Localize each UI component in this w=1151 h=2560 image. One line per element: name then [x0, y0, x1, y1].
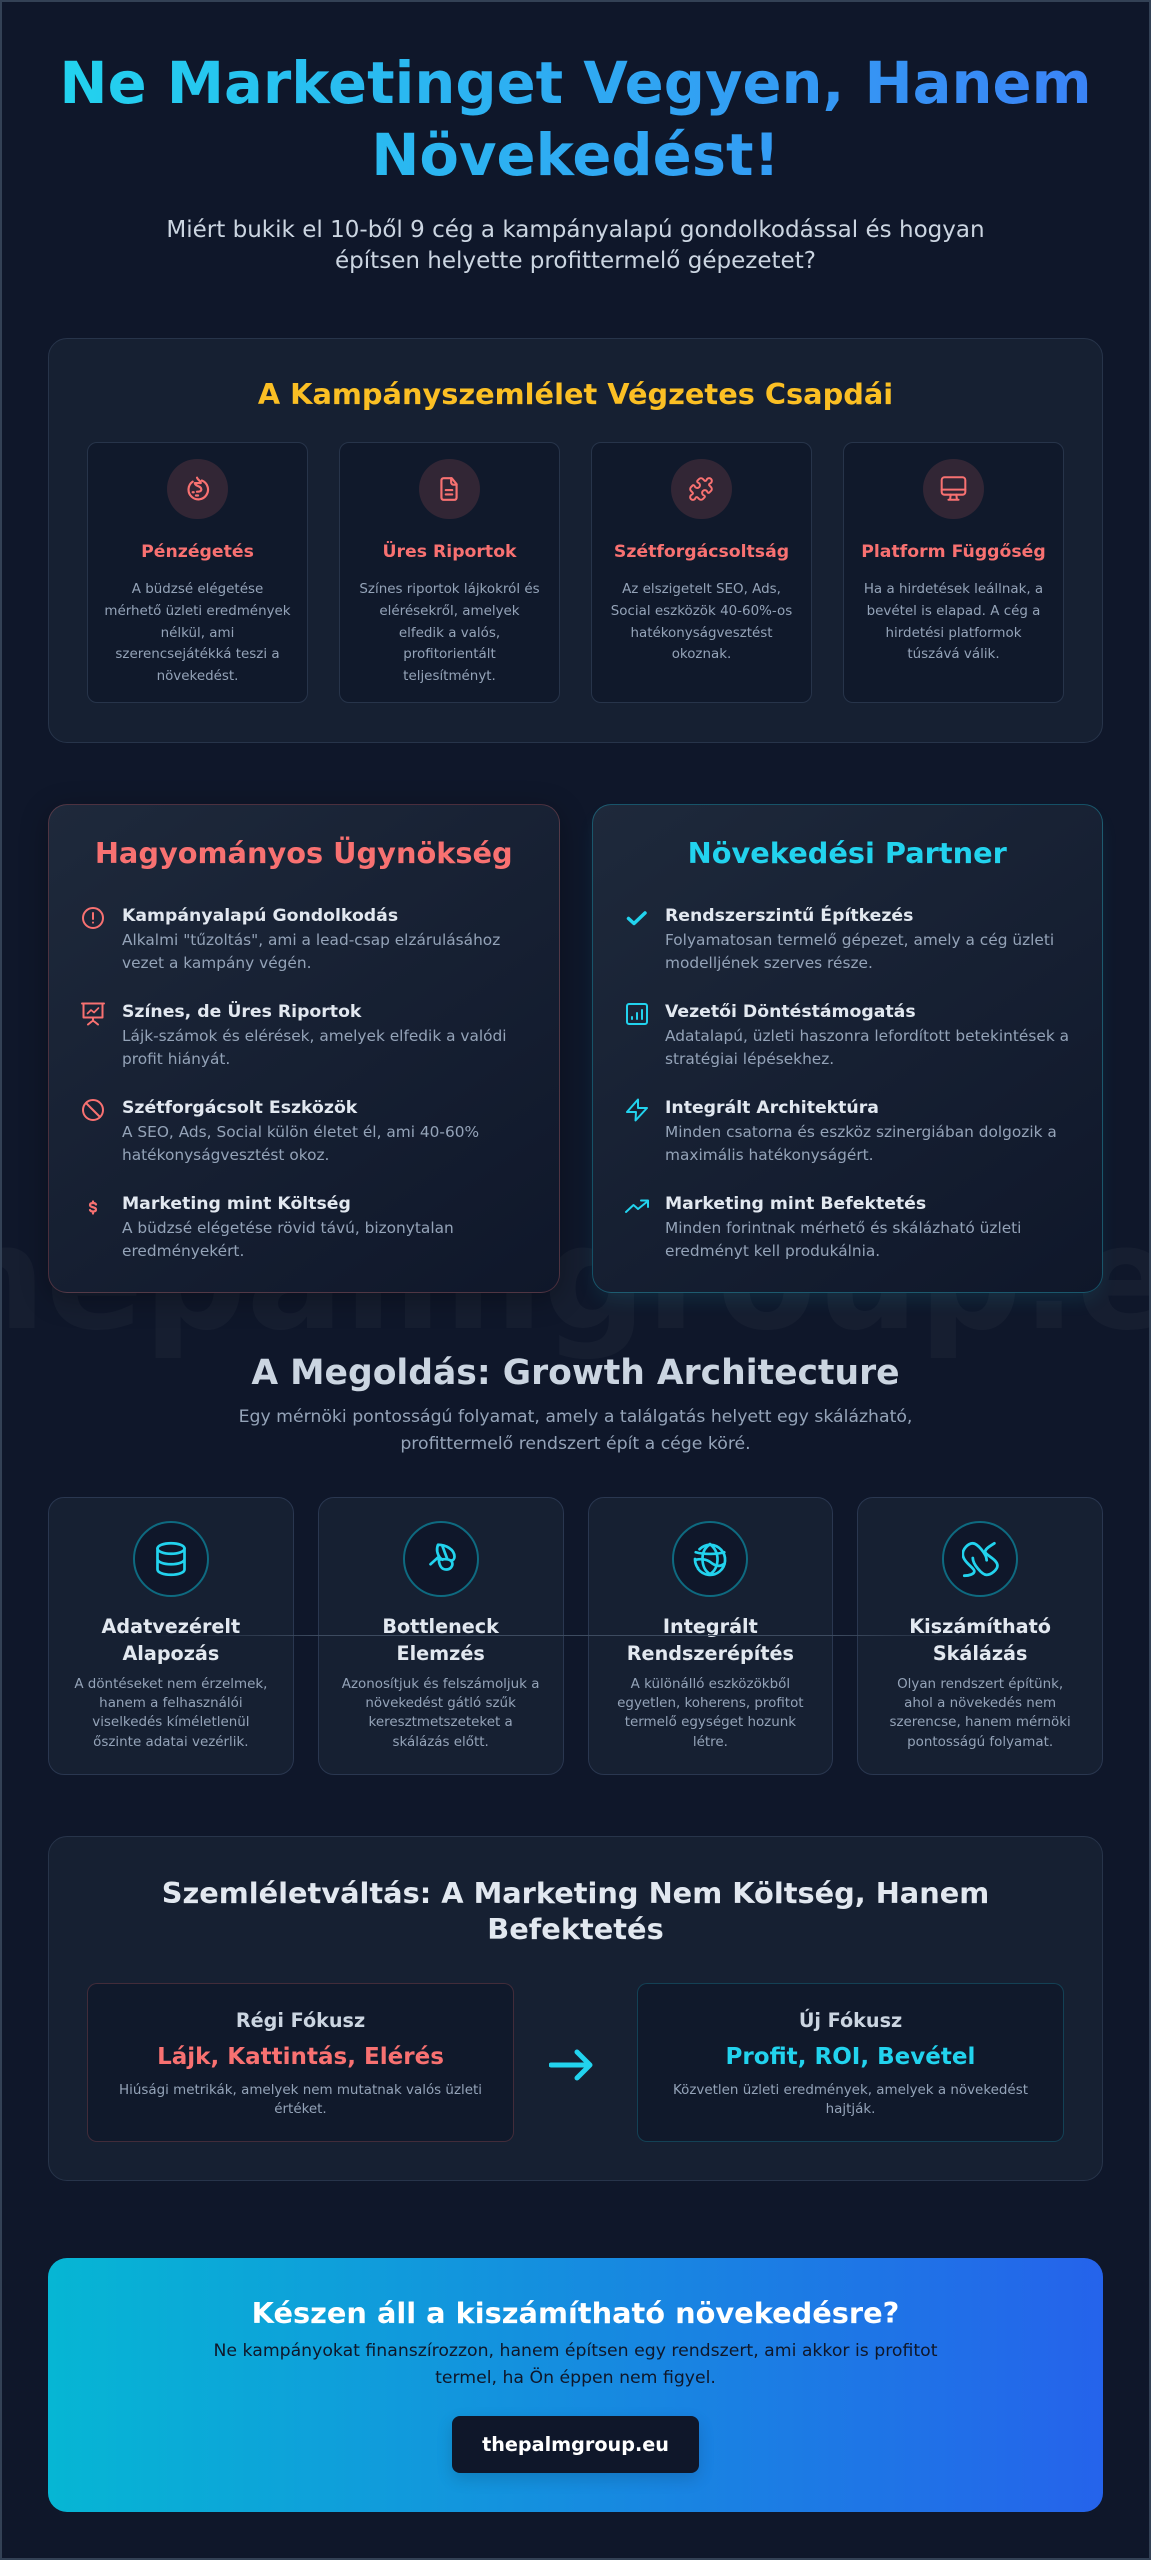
card title: Szétforgácsoltság	[614, 542, 789, 562]
card: Platform Függőség	[843, 442, 1064, 703]
card text: növekedést.	[157, 669, 238, 684]
card title	[627, 1615, 794, 1665]
description: Hiúsági metrikák, amelyek nem mutatnak valós üzleti	[119, 2083, 482, 2098]
card text: szerencse, hanem mérnöki	[889, 1715, 1071, 1730]
call to action	[48, 2258, 1103, 2512]
icon: document	[419, 459, 480, 519]
card text: keresztmetszeteket a	[369, 1715, 513, 1730]
item: campaign thinking	[82, 906, 500, 972]
icon: ban	[82, 1099, 104, 1121]
card: Szétforgácsoltság	[591, 442, 812, 703]
card text: egyetlen, koherens, profitot	[617, 1696, 804, 1711]
card text: mérhető üzleti eredmények	[104, 604, 291, 619]
item text: hatékonyságvesztést okoz.	[122, 1146, 329, 1164]
item text	[122, 931, 500, 972]
card title: Üres Riportok	[382, 542, 517, 562]
item text: eredményekért.	[122, 1242, 244, 1260]
card: data-driven foundation	[48, 1497, 294, 1775]
icon: check	[626, 911, 647, 926]
card text: skálázás előtt.	[392, 1735, 489, 1750]
card title: Elemzés	[396, 1642, 485, 1665]
item text	[122, 1219, 454, 1260]
card text: A büdzsé elégetése	[132, 582, 263, 597]
card title: Integrált	[663, 1615, 758, 1638]
card text: viselkedés kíméletlenül	[92, 1715, 250, 1730]
card title	[382, 1615, 500, 1665]
card text: növekedést gátló szűk	[365, 1696, 516, 1711]
cta text: termel, ha Ön éppen nem figyel.	[435, 2368, 716, 2388]
card text: Színes riportok lájkokról és	[359, 582, 540, 597]
item text: profit hiányát.	[122, 1050, 230, 1068]
item text: Lájk-számok és elérések, amelyek elfedik a valódi	[122, 1027, 507, 1045]
icon: presentation chart	[81, 1002, 105, 1026]
icon: database	[133, 1521, 209, 1597]
card text	[342, 1677, 539, 1750]
heading: traps: A Kampányszemlélet Végzetes Csapdái	[258, 377, 893, 411]
item text	[122, 1123, 479, 1164]
card text: szerencsejátékká teszi a	[115, 647, 280, 662]
connector line	[153, 1635, 998, 1636]
cta text	[48, 2338, 1103, 2392]
card text: teljesítményt.	[403, 669, 496, 684]
item text	[665, 1027, 1069, 1068]
card text: elfedik a valós,	[399, 626, 500, 641]
item title: Kampányalapú Gondolkodás	[122, 906, 398, 926]
card text: nélkül, ami	[161, 626, 234, 641]
card text: hanem a felhasználói	[99, 1696, 243, 1711]
solution subtitle: profittermelő rendszert épít a cége köré.	[400, 1434, 751, 1454]
panel: campaign traps	[48, 338, 1103, 743]
icon: dollar	[88, 1200, 98, 1215]
icon: trending up	[625, 1200, 649, 1213]
new metrics: Profit, ROI, Bevétel	[726, 2044, 975, 2070]
card text: Social eszközök 40-60%-os	[611, 604, 792, 619]
heading: mindset shift: Befektetés	[487, 1912, 664, 1946]
heading: mindset shift: Szemléletváltás: A Marketing Nem Költség, Hanem	[162, 1876, 989, 1910]
card title	[909, 1615, 1051, 1665]
card title	[102, 1615, 240, 1665]
description	[638, 2081, 1063, 2119]
card title: Alapozás	[122, 1642, 219, 1665]
cta text: Ne kampányokat finanszírozzon, hanem építsen egy rendszert, ami akkor is profitot	[214, 2341, 937, 2361]
item text	[665, 1219, 1021, 1260]
card title: Kiszámítható	[909, 1615, 1051, 1638]
item: empty reports	[81, 1001, 507, 1068]
solution title: A Megoldás: Growth Architecture	[251, 1353, 900, 1393]
card title: Platform Függőség	[861, 542, 1046, 562]
card text: pontosságú folyamat.	[907, 1735, 1053, 1750]
card text: okoznak.	[672, 647, 731, 662]
cta heading: Készen áll a kiszámítható növekedésre?	[252, 2296, 899, 2330]
item text: Adatalapú, üzleti haszonra lefordított betekintések a	[665, 1027, 1069, 1045]
card text: Olyan rendszert építünk,	[897, 1677, 1063, 1692]
card text: Azonosítjuk és felszámoljuk a	[342, 1677, 539, 1692]
item text: Folyamatosan termelő gépezet, amely a cég üzleti	[665, 931, 1054, 949]
icon: alert	[82, 907, 104, 929]
panel: mindset shift	[48, 1836, 1103, 2181]
card: integrated systems	[588, 1497, 833, 1775]
icon: monitor	[923, 459, 984, 519]
item title: Vezetői Döntéstámogatás	[665, 1002, 916, 1022]
icon: bar chart	[626, 1003, 648, 1025]
card text: A különálló eszközökből	[631, 1677, 790, 1692]
card text: Az elszigetelt SEO, Ads,	[622, 582, 781, 597]
item title: Marketing mint Befektetés	[665, 1194, 926, 1214]
item text	[665, 1123, 1057, 1164]
card text	[359, 582, 540, 684]
subtitle: építsen helyette profittermelő gépezetet?	[335, 248, 816, 274]
description	[88, 2081, 513, 2119]
card text	[74, 1677, 267, 1750]
arrow	[549, 2043, 593, 2087]
card text: hatékonyságvesztést	[630, 626, 773, 641]
item: marketing as investment	[625, 1194, 1021, 1260]
icon: burning money	[167, 459, 228, 519]
item title: Színes, de Üres Riportok	[122, 1002, 361, 1022]
item title: Marketing mint Költség	[122, 1194, 351, 1214]
heading: mindset shift	[49, 1875, 1102, 1947]
card: bottleneck analysis	[318, 1497, 564, 1775]
panel: growth partner	[592, 804, 1103, 1293]
item: system building	[626, 905, 1054, 972]
box: old focus	[87, 1983, 514, 2142]
item text: A büdzsé elégetése rövid távú, bizonytalan	[122, 1219, 454, 1237]
item text: Minden forintnak mérhető és skálázható üzleti	[665, 1219, 1021, 1237]
label: Új Fókusz	[799, 2009, 902, 2032]
item: executive decision support	[626, 1002, 1069, 1068]
card title: Rendszerépítés	[627, 1642, 794, 1665]
card text: termelő egységet hozunk	[625, 1715, 796, 1730]
item title: Rendszerszintű Építkezés	[665, 906, 913, 926]
item text: Alkalmi "tűzoltás", ami a lead-csap elzárulásához	[122, 931, 500, 949]
card text	[104, 582, 291, 684]
section heading: solution	[239, 1353, 912, 1454]
title: Ne Marketinget Vegyen, Hanem	[59, 50, 1092, 116]
solution subtitle	[239, 1407, 912, 1454]
heading: traditional agency: Hagyományos Ügynökség	[95, 836, 513, 870]
item text	[122, 1027, 507, 1068]
card text: létre.	[693, 1735, 728, 1750]
item text	[665, 931, 1054, 972]
card title: Pénzégetés	[141, 542, 254, 562]
card text	[611, 582, 792, 662]
card text	[864, 582, 1043, 662]
subtitle: Miért bukik el 10-ből 9 cég a kampányalapú gondolkodással és hogyan	[166, 216, 985, 242]
item text: modelljének szerves része.	[665, 954, 873, 972]
card text: A döntéseket nem érzelmek,	[74, 1677, 267, 1692]
card text	[889, 1677, 1071, 1750]
card text: Ha a hirdetések leállnak, a	[864, 582, 1043, 597]
box: new focus	[637, 1983, 1064, 2142]
card text: bevétel is elapad. A cég a	[867, 604, 1040, 619]
icon: globe	[672, 1521, 748, 1597]
card text	[617, 1677, 804, 1750]
description: Közvetlen üzleti eredmények, amelyek a növekedést	[673, 2083, 1028, 2098]
item title: Integrált Architektúra	[665, 1098, 879, 1118]
item title: Szétforgácsolt Eszközök	[122, 1098, 357, 1118]
description: hajtják.	[826, 2102, 875, 2117]
panel: traditional agency	[48, 804, 560, 1293]
card text: hirdetési platformok	[886, 626, 1021, 641]
card: Pénzégetés	[87, 442, 308, 703]
card title: Bottleneck	[382, 1615, 499, 1638]
solution subtitle: Egy mérnöki pontosságú folyamat, amely a találgatás helyett egy skálázható,	[239, 1407, 912, 1427]
subtitle	[166, 216, 985, 274]
card: predictable scaling	[857, 1497, 1103, 1775]
card title: Skálázás	[933, 1642, 1027, 1665]
item text: A SEO, Ads, Social külön életet él, ami 40-60%	[122, 1123, 479, 1141]
title	[48, 48, 1103, 192]
label: Régi Fókusz	[236, 2009, 365, 2032]
card: Üres Riportok	[339, 442, 560, 703]
header	[59, 50, 1092, 274]
icon: lightning	[626, 1098, 648, 1122]
card text: ahol a növekedés nem	[904, 1696, 1056, 1711]
item: fragmented tools	[82, 1098, 479, 1164]
item text: vezet a kampány végén.	[122, 954, 311, 972]
item text: Minden csatorna és eszköz szinergiában dolgozik a	[665, 1123, 1057, 1141]
item: marketing as cost	[88, 1194, 454, 1260]
card title: Adatvezérelt	[102, 1615, 240, 1638]
heading: growth partner: Növekedési Partner	[688, 836, 1007, 870]
item: integrated architecture	[626, 1098, 1057, 1164]
button	[452, 2416, 699, 2473]
card text: profitorientált	[403, 647, 496, 662]
card text: őszinte adatai vezérlik.	[93, 1735, 249, 1750]
icon: puzzle	[671, 459, 732, 519]
card text: elérésekről, amelyek	[379, 604, 520, 619]
icon: connected loops	[942, 1521, 1018, 1597]
title: Növekedést!	[371, 122, 780, 188]
item text: stratégiai lépésekhez.	[665, 1050, 834, 1068]
icon: leaf branch	[403, 1521, 479, 1597]
card text: túszává válik.	[907, 647, 1000, 662]
item text: maximális hatékonyságért.	[665, 1146, 874, 1164]
old metrics: Lájk, Kattintás, Elérés	[157, 2044, 444, 2070]
description: értéket.	[274, 2102, 327, 2117]
button: thepalmgroup.eu	[482, 2433, 669, 2456]
item text: eredményt kell produkálnia.	[665, 1242, 880, 1260]
